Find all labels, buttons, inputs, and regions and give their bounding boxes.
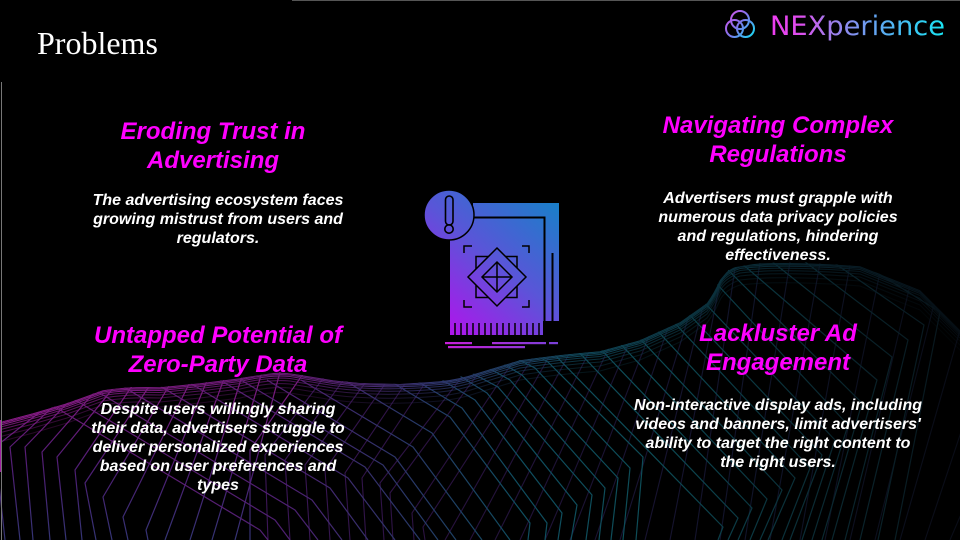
text: Lackluster Ad Engagement: Non-interactive display ads, including	[634, 397, 922, 414]
text: Lackluster Ad Engagement: ability to target the right content to	[646, 435, 910, 452]
diagonal lattice lines	[10, 258, 940, 540]
text: Eroding Trust: The advertising ecosystem faces	[93, 192, 343, 209]
heading: Navigating Complex Regulations: Regulations	[709, 141, 847, 168]
logo: NEXperience	[725, 10, 945, 42]
text: Untapped Potential: types	[197, 477, 239, 494]
text: Untapped Potential: their data, advertisers struggle to	[91, 420, 345, 437]
text: Navigating Complex Regulations: Advertisers must grapple with	[663, 190, 893, 207]
text: Eroding Trust: growing mistrust from users and	[93, 211, 343, 228]
text: Lackluster Ad Engagement: the right users.	[720, 454, 836, 471]
text: Untapped Potential	[91, 401, 345, 494]
heading: Eroding Trust: Advertising	[147, 147, 279, 174]
heading: Untapped Potential	[94, 322, 344, 378]
heading: Lackluster Ad Engagement: Lackluster Ad	[699, 320, 857, 347]
text: Navigating Complex Regulations: effectiveness.	[725, 247, 831, 264]
title: Problems	[37, 25, 158, 61]
text: Navigating Complex Regulations: and regulations, hindering	[678, 228, 878, 245]
heading: Lackluster Ad Engagement	[699, 320, 858, 376]
logo wordmark: NEXperience	[770, 11, 945, 42]
text: Untapped Potential: Despite users willingly sharing	[101, 401, 335, 418]
heading: Lackluster Ad Engagement: Engagement	[706, 349, 850, 376]
icon: alert document	[424, 190, 559, 348]
text: Navigating Complex Regulations	[658, 190, 898, 264]
heading: Untapped Potential: Untapped Potential of	[94, 322, 342, 349]
left lattice lines	[0, 372, 303, 540]
text: Untapped Potential: deliver personalized experiences	[93, 439, 343, 456]
text: Navigating Complex Regulations: numerous data privacy policies	[658, 209, 898, 226]
heading: Untapped Potential: Zero-Party Data	[129, 351, 307, 378]
text: Untapped Potential: based on user preferences and	[100, 458, 336, 475]
text: Lackluster Ad Engagement	[634, 397, 922, 471]
text: Eroding Trust	[93, 192, 344, 247]
heading: Eroding Trust	[120, 118, 305, 174]
heading: Eroding Trust: Eroding Trust in	[121, 118, 305, 145]
text: Eroding Trust: regulators.	[177, 230, 259, 247]
text: Lackluster Ad Engagement: videos and banners, limit advertisers'	[635, 416, 921, 433]
heading: Navigating Complex Regulations: Navigating Complex	[663, 112, 893, 139]
ridge band	[0, 264, 960, 443]
mid and right lattice lines	[265, 262, 960, 540]
heading: Navigating Complex Regulations	[663, 112, 894, 168]
logo mark	[726, 11, 754, 37]
